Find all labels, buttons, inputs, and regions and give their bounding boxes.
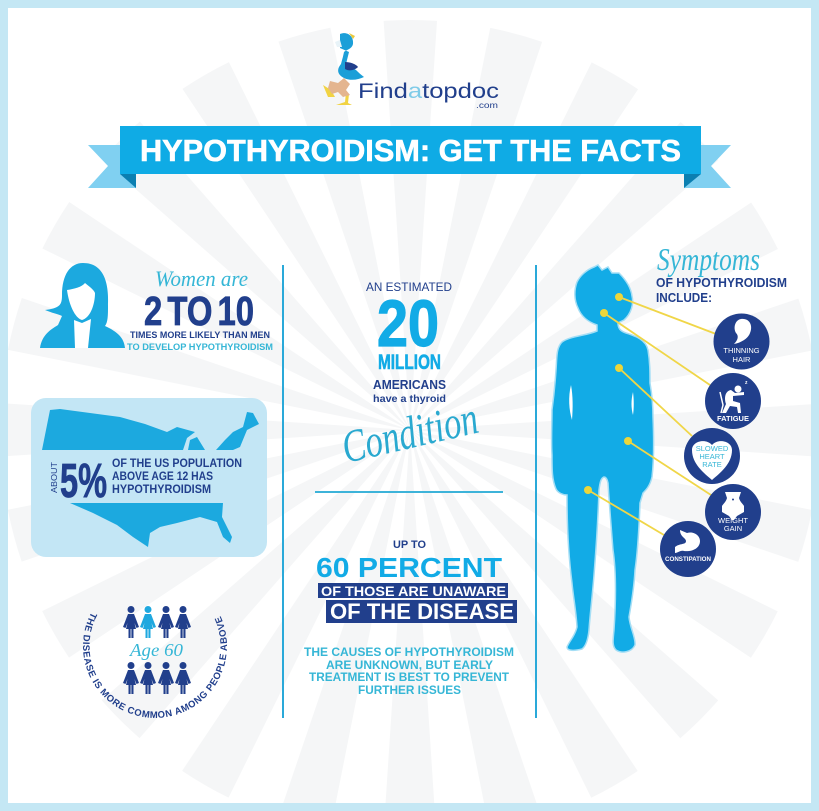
us map upper half [42, 409, 259, 450]
age 60 figure [83, 606, 228, 718]
logo [323, 33, 499, 110]
text: of hypothyroidism: OF HYPOTHYROIDISM [656, 276, 787, 290]
icon: heart [692, 441, 732, 480]
connector lines [588, 297, 716, 535]
population text: ABOVE AGE 12 HAS [112, 471, 213, 483]
women statistic [127, 266, 273, 353]
symptom: constipation [660, 521, 716, 577]
center statistic: 20 million [337, 280, 483, 473]
icon: stomach [675, 530, 700, 553]
center statistic: 60 percent [304, 539, 517, 697]
panel: us population [31, 398, 267, 557]
script text: condition: Condition [337, 392, 483, 473]
causes text [304, 645, 514, 697]
causes text: THE CAUSES OF HYPOTHYROIDISM [304, 645, 514, 659]
number: 2 to 10: 2 TO 10 [144, 288, 254, 334]
number: 60 percent: 60 PERCENT [316, 552, 502, 583]
logo wordmark: Find atopdoc [358, 80, 499, 103]
symptom: constipation: CONSTIPATION [665, 556, 711, 563]
people row top [123, 606, 191, 638]
title ribbon [88, 126, 731, 188]
right column divider [535, 265, 537, 718]
symptom: thinning hair: THINNING [723, 346, 760, 355]
icon: torso [722, 492, 744, 520]
text: up to: UP TO [393, 539, 426, 551]
us map lower half [70, 503, 232, 547]
script heading: women are: Women are [155, 266, 248, 291]
text: have a thyroid: have a thyroid [373, 393, 446, 405]
causes text: ARE UNKNOWN, BUT EARLY [326, 658, 493, 672]
population text: HYPOTHYROIDISM [112, 484, 211, 496]
symptom: fatigue [705, 373, 761, 429]
caption line two: TO DEVELOP HYPOTHYROIDISM [127, 342, 273, 353]
symptoms heading [656, 241, 787, 305]
ribbon band [120, 126, 701, 174]
people row bottom [123, 662, 191, 694]
population text [112, 458, 242, 496]
bar: of those are unaware: OF THOSE ARE UNAWARE [321, 583, 506, 599]
icon: sleeping person on chair: z [745, 380, 748, 386]
icon: duck mascot [323, 33, 364, 105]
icon: hair [734, 319, 751, 344]
symptom: slowed heart rate: SLOWED [696, 444, 729, 453]
panel background [31, 398, 267, 557]
population text: OF THE US POPULATION [112, 458, 242, 470]
left ribbon tail [88, 145, 136, 188]
text: an estimated: AN ESTIMATED [366, 280, 452, 294]
symptom: thinning hair: HAIR [733, 355, 751, 364]
text: americans: AMERICANS [373, 377, 446, 392]
script text: symptoms: Symptoms [657, 241, 760, 277]
connector dots [584, 293, 632, 494]
symptom: slowed heart rate: RATE [702, 460, 722, 469]
label: about: ABOUT [49, 462, 59, 493]
body silhouette [552, 265, 654, 652]
causes text: FURTHER ISSUES [358, 683, 461, 697]
symptom: thinning hair [714, 314, 770, 370]
right ribbon tail [684, 145, 731, 188]
icon: woman portrait [40, 263, 125, 348]
caption line one: TIMES MORE LIKELY THAN MEN [130, 330, 270, 341]
text: include: INCLUDE: [656, 291, 712, 305]
script label: age 60: Age 60 [129, 640, 183, 660]
symptom: weight gain: WEIGHT [718, 516, 748, 525]
left ribbon fold [120, 174, 136, 188]
number: 20: 20 [377, 286, 439, 360]
number: 5 percent: 5% [60, 455, 107, 508]
symptom: slowed heart rate: HEART [699, 452, 725, 461]
symptom: slowed heart rate [684, 428, 740, 484]
text: million: MILLION [378, 351, 441, 374]
bar: of the disease: OF THE DISEASE [330, 599, 514, 624]
left column divider [282, 265, 284, 718]
symptom: weight gain [705, 484, 761, 540]
arc caption: THE DISEASE IS MORE COMMON AMONG PEOPLE ABOVE [83, 614, 228, 718]
sunburst background rays [205, 225, 615, 635]
symptom: weight gain: GAIN [724, 524, 742, 533]
title: HYPOTHYROIDISM: GET THE FACTS [140, 133, 681, 168]
right ribbon fold [684, 174, 701, 188]
symptom: fatigue: FATIGUE [717, 414, 749, 423]
causes text: TREATMENT IS BEST TO PREVENT [309, 670, 510, 684]
logo suffix: .com [476, 101, 498, 110]
center divider [315, 491, 503, 493]
